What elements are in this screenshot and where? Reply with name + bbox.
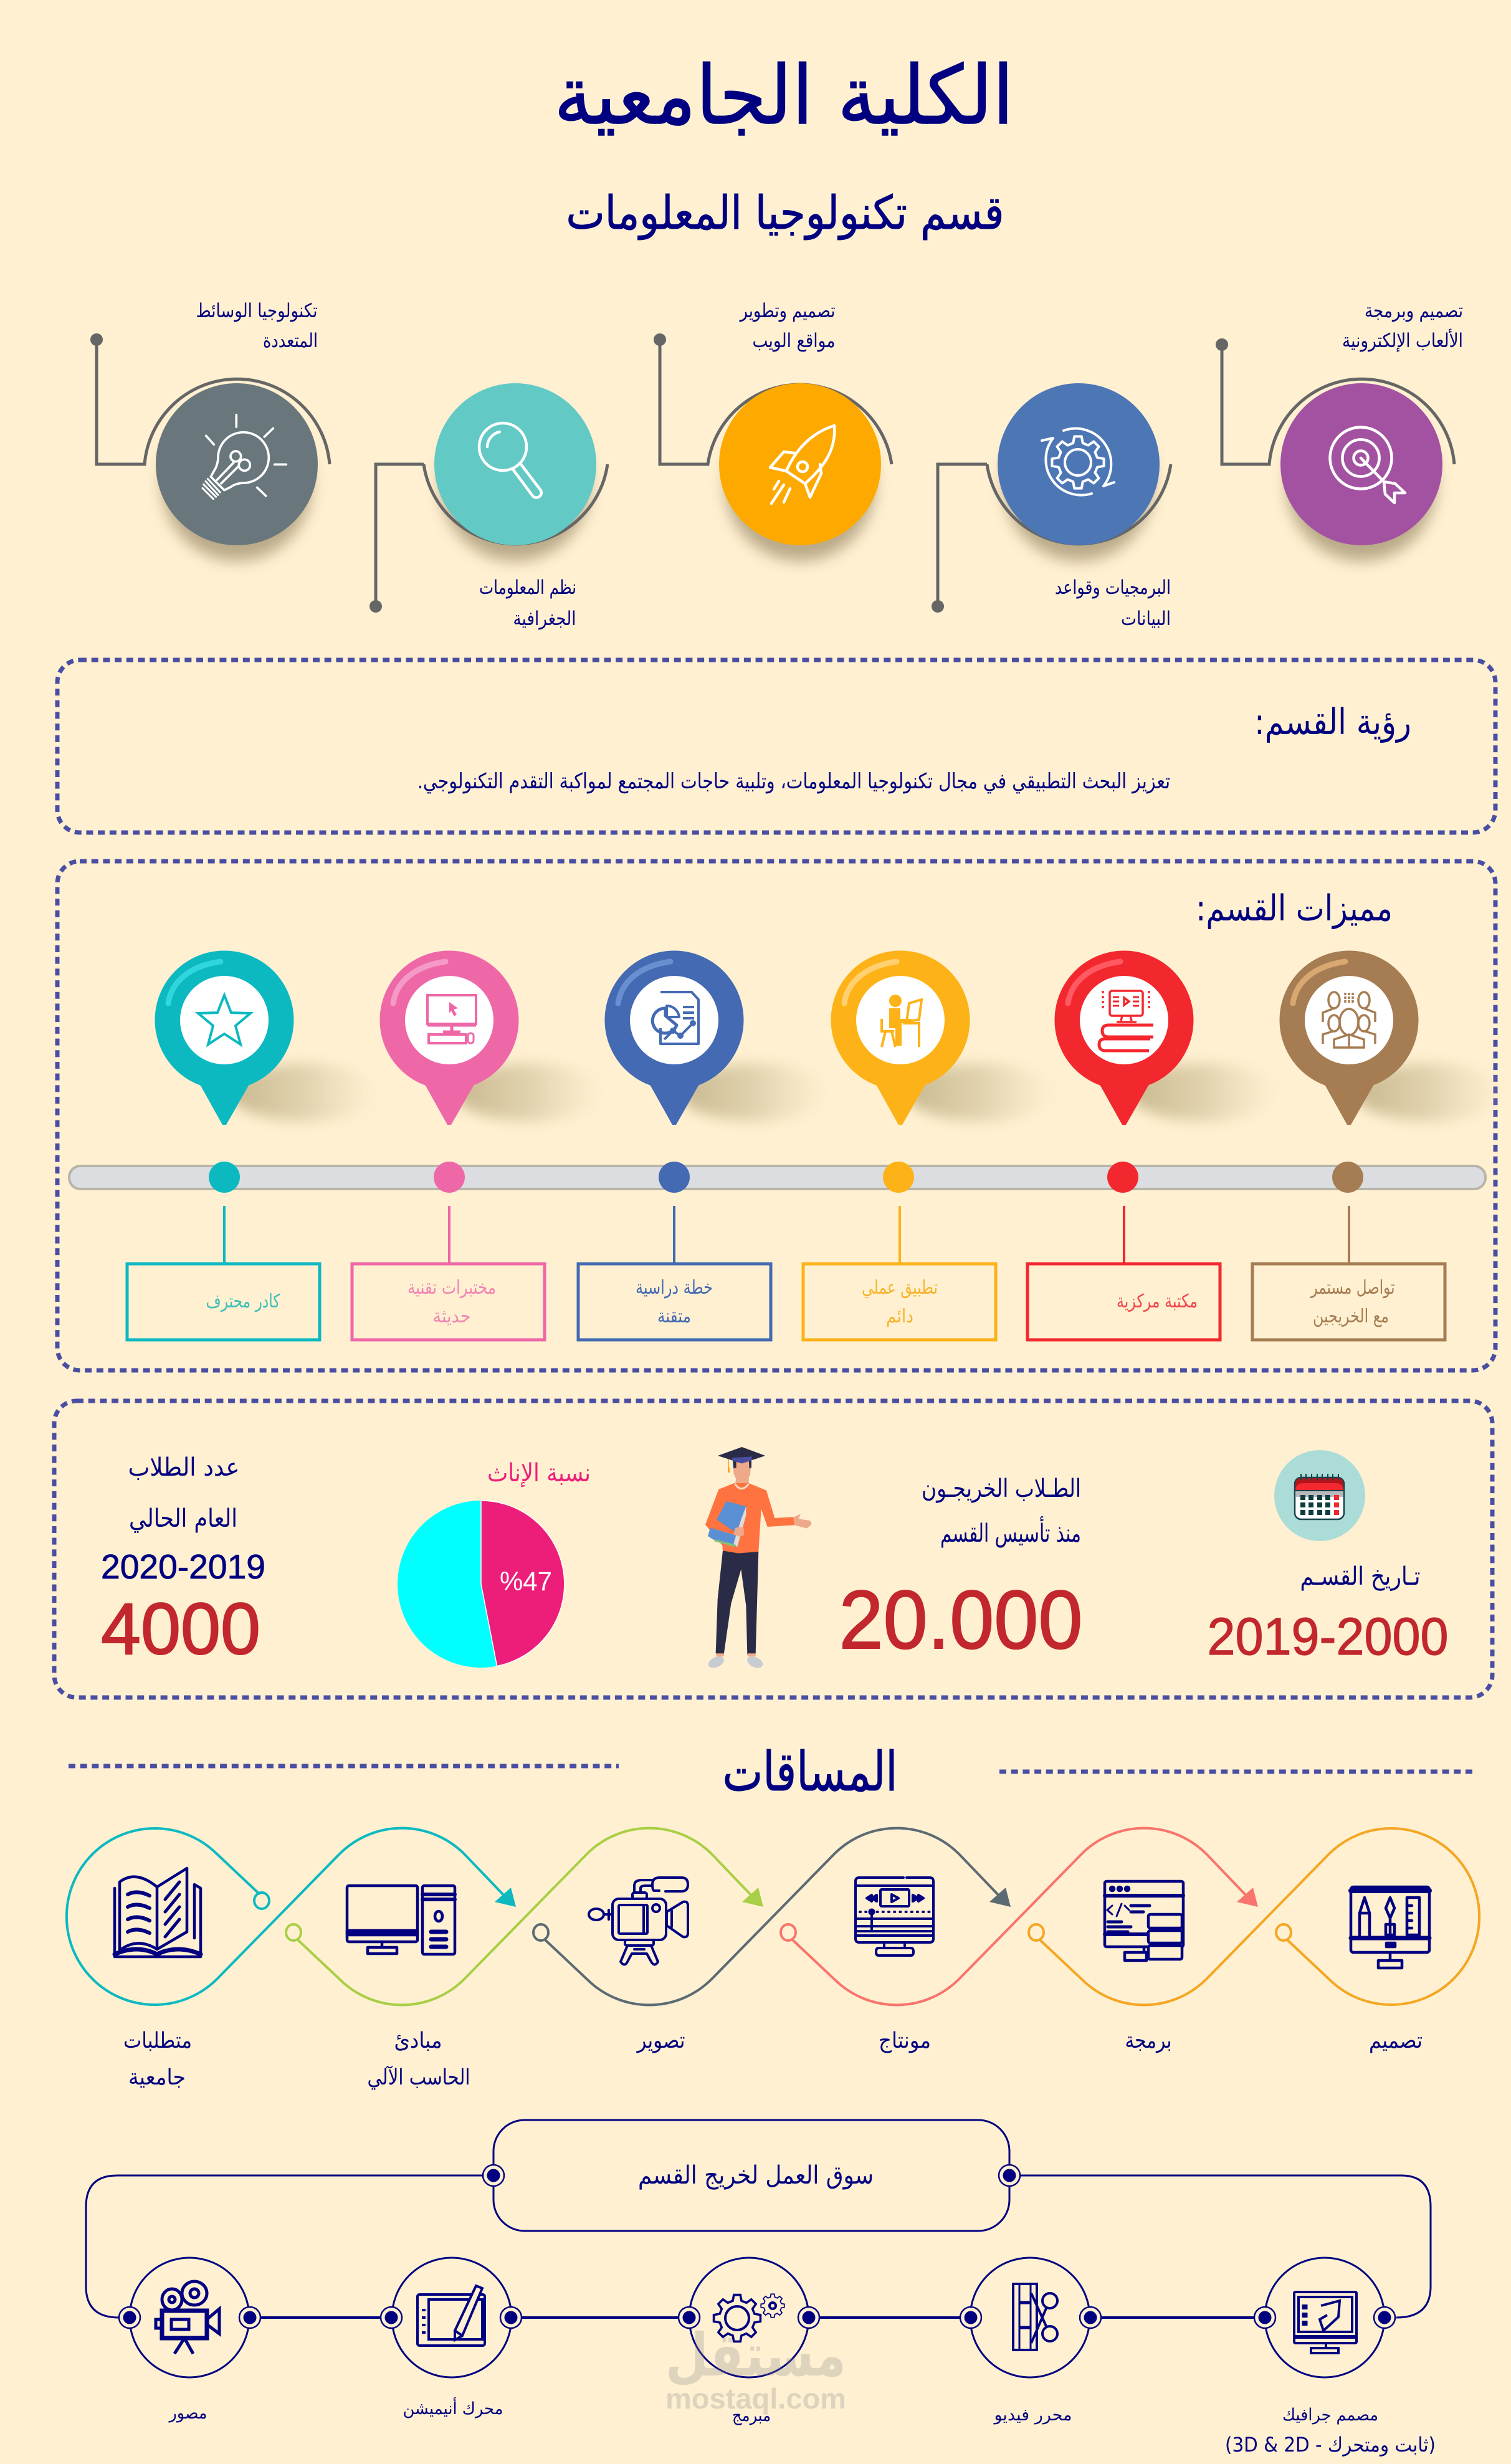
vision text: تعزيز البحث التطبيقي في مجال تكنولوجيا المعلومات، وتلبية حاجات المجتمع لمواكبة التقدم التكنولوجي. (417, 769, 1170, 794)
job: programmer (679, 2258, 819, 2425)
stat: student count: عدد الطلاب (128, 1453, 239, 1482)
course icons (115, 1868, 1429, 1968)
item: web design: تصميم وتطوير (739, 300, 835, 322)
ribbon: gray (533, 1828, 1011, 2005)
feature box: professional staff: كادر محترف (206, 1291, 280, 1312)
stat: department history: 2019-2000 (1208, 1607, 1448, 1666)
course ribbon diagram (67, 1828, 1479, 2005)
item: games programming: الألعاب الإلكترونية (1342, 328, 1463, 352)
item: programming and databases: البرمجيات وقواعد (1055, 576, 1171, 599)
course labels: مونتاج (879, 2028, 931, 2053)
item: games programming (1216, 300, 1463, 561)
course labels: جامعية (128, 2065, 186, 2090)
stat: graduates (839, 1474, 1083, 1666)
stat: student count (101, 1453, 265, 1669)
job market diagram (86, 2120, 1436, 2457)
pin: central library (1054, 951, 1281, 1125)
job: animator: محرك أنيميشن (403, 2397, 503, 2419)
box: job market (483, 2120, 1020, 2231)
box: job market: سوق العمل لخريج القسم (638, 2161, 874, 2190)
feature box: study plan: خطة دراسية (636, 1277, 713, 1299)
item: GIS: الجغرافية (513, 608, 576, 630)
icon: design monitor (1351, 1887, 1429, 1968)
heading: courses: المساقات (723, 1740, 897, 1803)
item: games programming: تصميم وبرمجة (1365, 300, 1463, 322)
feature box: modern labs: مختبرات تقنية (408, 1277, 496, 1299)
feature box: alumni contact (1252, 1206, 1445, 1340)
feature box: study plan: متقنة (657, 1306, 691, 1327)
icon: calendar (1274, 1450, 1365, 1541)
course labels: متطلبات (123, 2028, 192, 2053)
job: photographer: مصور (168, 2404, 207, 2423)
feature box: professional staff (127, 1206, 320, 1340)
stat: student count: العام الحالي (129, 1504, 237, 1533)
feature box: practical application: تطبيق عملي (862, 1277, 938, 1299)
icon: video camera (589, 1878, 688, 1965)
job: video editor (960, 2258, 1101, 2425)
course labels: مبادئ (394, 2028, 442, 2053)
subtitle: قسم تكنولوجيا المعلومات (566, 186, 1004, 240)
item: GIS: نظم المعلومات (479, 576, 576, 599)
heading: vision: رؤية القسم: (1254, 702, 1411, 743)
feature box: alumni contact: مع الخريجين (1313, 1306, 1389, 1327)
feature box: study plan (578, 1206, 771, 1340)
job: graphic designer: مصمم جرافيك (1282, 2405, 1378, 2425)
item: programming and databases (932, 383, 1171, 630)
stat: student count: 2020-2019 (101, 1547, 265, 1586)
ribbon: coral (781, 1828, 1258, 2005)
stat: student count: 4000 (101, 1588, 260, 1669)
watermark: مستقل (665, 2321, 846, 2390)
item: web design: مواقع الويب (753, 330, 835, 352)
ribbon: green (286, 1828, 763, 2005)
feature box: modern labs (352, 1206, 545, 1340)
stat: department history (1208, 1562, 1448, 1666)
heading: features: مميزات القسم: (1196, 888, 1393, 929)
feature box: central library: مكتبة مركزية (1117, 1291, 1198, 1312)
pin: study plan (604, 951, 831, 1125)
icon: video editing monitor (856, 1878, 933, 1955)
panel: department vision (57, 660, 1495, 833)
item: programming and databases: البيانات (1121, 608, 1171, 630)
timeline dots (209, 1162, 1363, 1193)
watermark: mostaql.com (665, 2382, 846, 2415)
pin: alumni contact (1280, 951, 1506, 1125)
feature box: alumni contact: تواصل مستمر (1310, 1277, 1394, 1299)
item: web design (654, 300, 892, 561)
stat: graduates: 20.000 (839, 1574, 1083, 1666)
pin: modern labs (380, 951, 606, 1125)
course labels: تصوير (636, 2028, 685, 2053)
item: multimedia technology: المتعددة (263, 330, 318, 352)
title: الكلية الجامعية (554, 48, 1014, 143)
item: GIS (369, 383, 608, 630)
icon: code window (1105, 1881, 1183, 1960)
stat: female ratio pie chart: نسبة الإناث (487, 1459, 591, 1487)
timeline bar (69, 1166, 1485, 1189)
item: multimedia technology: تكنولوجيا الوسائط (196, 300, 318, 322)
panel: statistics (54, 1401, 1492, 1698)
job: programmer: مبرمج (732, 2406, 771, 2425)
connector lines (86, 2175, 1431, 2318)
circle row: specializations (90, 300, 1463, 630)
stat: graduates: الطـلاب الخريجـون (922, 1474, 1081, 1503)
illustration: graduate student (705, 1447, 812, 1670)
watermark (665, 2321, 846, 2415)
icon: open book (115, 1868, 201, 1957)
stat: graduates: منذ تأسيس القسم (940, 1516, 1081, 1548)
stat: female ratio pie chart (398, 1459, 591, 1668)
job: video editor: محرر فيديو (993, 2405, 1072, 2425)
job: photographer (119, 2258, 260, 2423)
job: graphic designer: (ثابت ومتحرك - 3D & 2D) (1225, 2433, 1436, 2457)
feature box: practical application (803, 1206, 996, 1340)
pin: professional staff (155, 951, 381, 1125)
course labels: الحاسب الآلي (368, 2065, 470, 2090)
feature box: central library (1027, 1206, 1220, 1340)
stat: department history: تـاريخ القسـم (1300, 1562, 1421, 1591)
panel: department features (57, 861, 1506, 1370)
ribbon: orange (1029, 1828, 1479, 2005)
course labels (123, 2028, 1423, 2090)
job: graphic designer (1225, 2258, 1436, 2457)
ribbon: teal (67, 1828, 516, 2005)
course labels: برمجة (1125, 2028, 1171, 2053)
feature box: modern labs: حديثة (432, 1306, 471, 1327)
item: multimedia technology (90, 300, 330, 561)
pin: practical application (831, 951, 1057, 1125)
stat: female ratio pie chart: %47 (500, 1567, 552, 1597)
job: animator (381, 2258, 522, 2419)
course labels: تصميم (1369, 2028, 1423, 2053)
icon: desktop computer (347, 1886, 455, 1954)
feature box: practical application: دائم (886, 1306, 913, 1327)
